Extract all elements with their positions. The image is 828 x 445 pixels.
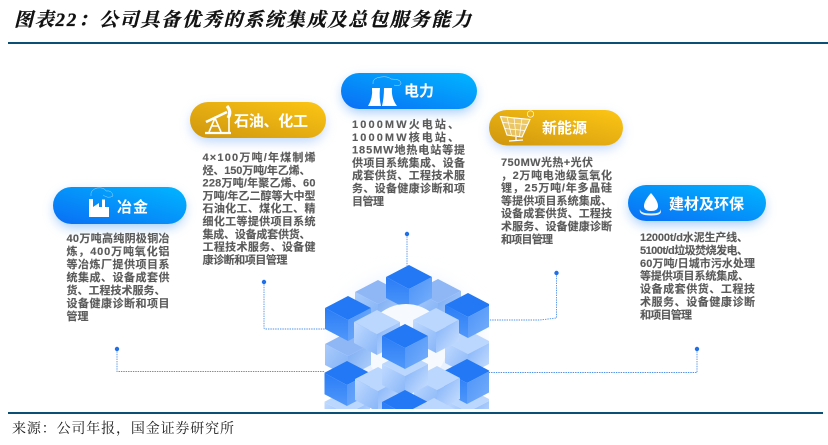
panel: 电力: 务、设备健康诊断和项 xyxy=(352,181,465,195)
panel: 石油、化工: 康诊断和项目管理 xyxy=(202,252,288,266)
icon: factory xyxy=(89,188,113,217)
icon: oil pump xyxy=(205,106,231,133)
panel: 电力: 目管理 xyxy=(352,194,384,208)
panel: 石油、化工: 4×100万吨/年煤制烯 xyxy=(202,150,316,164)
panel: 石油、化工: 石油化工、煤化工、精 xyxy=(202,201,316,215)
panel: 冶金: 冶金 xyxy=(117,198,148,216)
panel: 石油、化工: 细化工等提供项目系统 xyxy=(202,214,316,228)
panel: 建材及环保: 等提供项目系统集成、 xyxy=(640,269,749,283)
icon: solar panel xyxy=(500,111,534,141)
panel: 石油、化工: 烃、150万吨/年乙烯、 xyxy=(202,163,310,177)
panel: 冶金: 货、工程技术服务、 xyxy=(66,283,166,297)
panel: 电力 xyxy=(341,73,477,208)
panel: 新能源: ，2万吨电池级氢氧化 xyxy=(501,168,612,182)
panel: 建材及环保: 术服务、设备健康诊断 xyxy=(640,294,755,308)
icon: water drop xyxy=(640,193,661,216)
connector lines xyxy=(117,234,697,372)
panel: 电力: 1000MW火电站、 xyxy=(352,117,459,131)
panel: 电力: 供项目系统集成、设备 xyxy=(352,155,465,169)
panel: 电力: 1000MW核电站、 xyxy=(352,130,459,144)
panel: 石油、化工: 228万吨/年聚乙烯、60 xyxy=(202,176,316,190)
panel: 电力: 成套供货、工程技术服 xyxy=(352,168,465,182)
panel: 新能源: 750MW光热+光伏 xyxy=(501,155,593,169)
panel: 建材及环保: 建材及环保 xyxy=(669,195,744,213)
panel: 新能源: 锂，25万吨/年多晶硅 xyxy=(501,181,612,195)
panel: 电力: 电力 xyxy=(404,83,434,100)
panel: 新能源: 术服务、设备健康诊断 xyxy=(501,219,612,233)
panel: 新能源: 设备成套供货、工程技 xyxy=(501,206,612,220)
panel: 建材及环保: 5100t/d垃圾焚烧发电、 xyxy=(640,243,748,257)
panel: 建材及环保: 12000t/d水泥生产线、 xyxy=(640,230,748,244)
panel: 冶金: 炼，400万吨氧化铝 xyxy=(66,244,170,258)
central cube graphic xyxy=(324,264,489,409)
panel: 石油、化工: 万吨/年乙二醇等大中型 xyxy=(202,188,316,202)
panel: 石油、化工: 石油、化工 xyxy=(234,112,308,130)
panel: 冶金: 统集成、设备成套供 xyxy=(66,270,170,284)
panel: 电力: 185MW地热电站等提 xyxy=(352,143,465,157)
panel: 石油、化工 xyxy=(190,102,326,266)
panel: 石油、化工: 集成、设备成套供货、 xyxy=(202,227,310,241)
panel: 冶金: 设备健康诊断和项目 xyxy=(66,296,170,310)
panel: 新能源 xyxy=(489,110,623,246)
panel: 冶金: 40万吨高纯阴极铜冶 xyxy=(66,231,170,245)
panel: 建材及环保 xyxy=(628,185,766,321)
title: 图表22：公司具备优秀的系统集成及总包服务能力 xyxy=(14,9,473,31)
panel: 冶金: 管理 xyxy=(66,309,88,323)
panel: 石油、化工: 工程技术服务、设备健 xyxy=(202,240,316,254)
panel: 建材及环保: 和项目管理 xyxy=(640,307,692,321)
panel: 建材及环保: 设备成套供货、工程技 xyxy=(640,282,755,296)
icon: cooling towers xyxy=(368,77,401,106)
panel: 冶金 xyxy=(53,187,186,323)
connector dots xyxy=(115,232,699,351)
panel: 建材及环保: 60万吨/日城市污水处理 xyxy=(640,256,755,270)
source note: 来源：公司年报，国金证券研究所 xyxy=(12,420,234,437)
panel: 新能源: 新能源 xyxy=(542,119,587,137)
panel: 冶金: 等冶炼厂提供项目系 xyxy=(66,257,170,271)
panel: 新能源: 和项目管理 xyxy=(501,232,553,246)
panel: 新能源: 等提供项目系统集成、 xyxy=(501,193,612,207)
